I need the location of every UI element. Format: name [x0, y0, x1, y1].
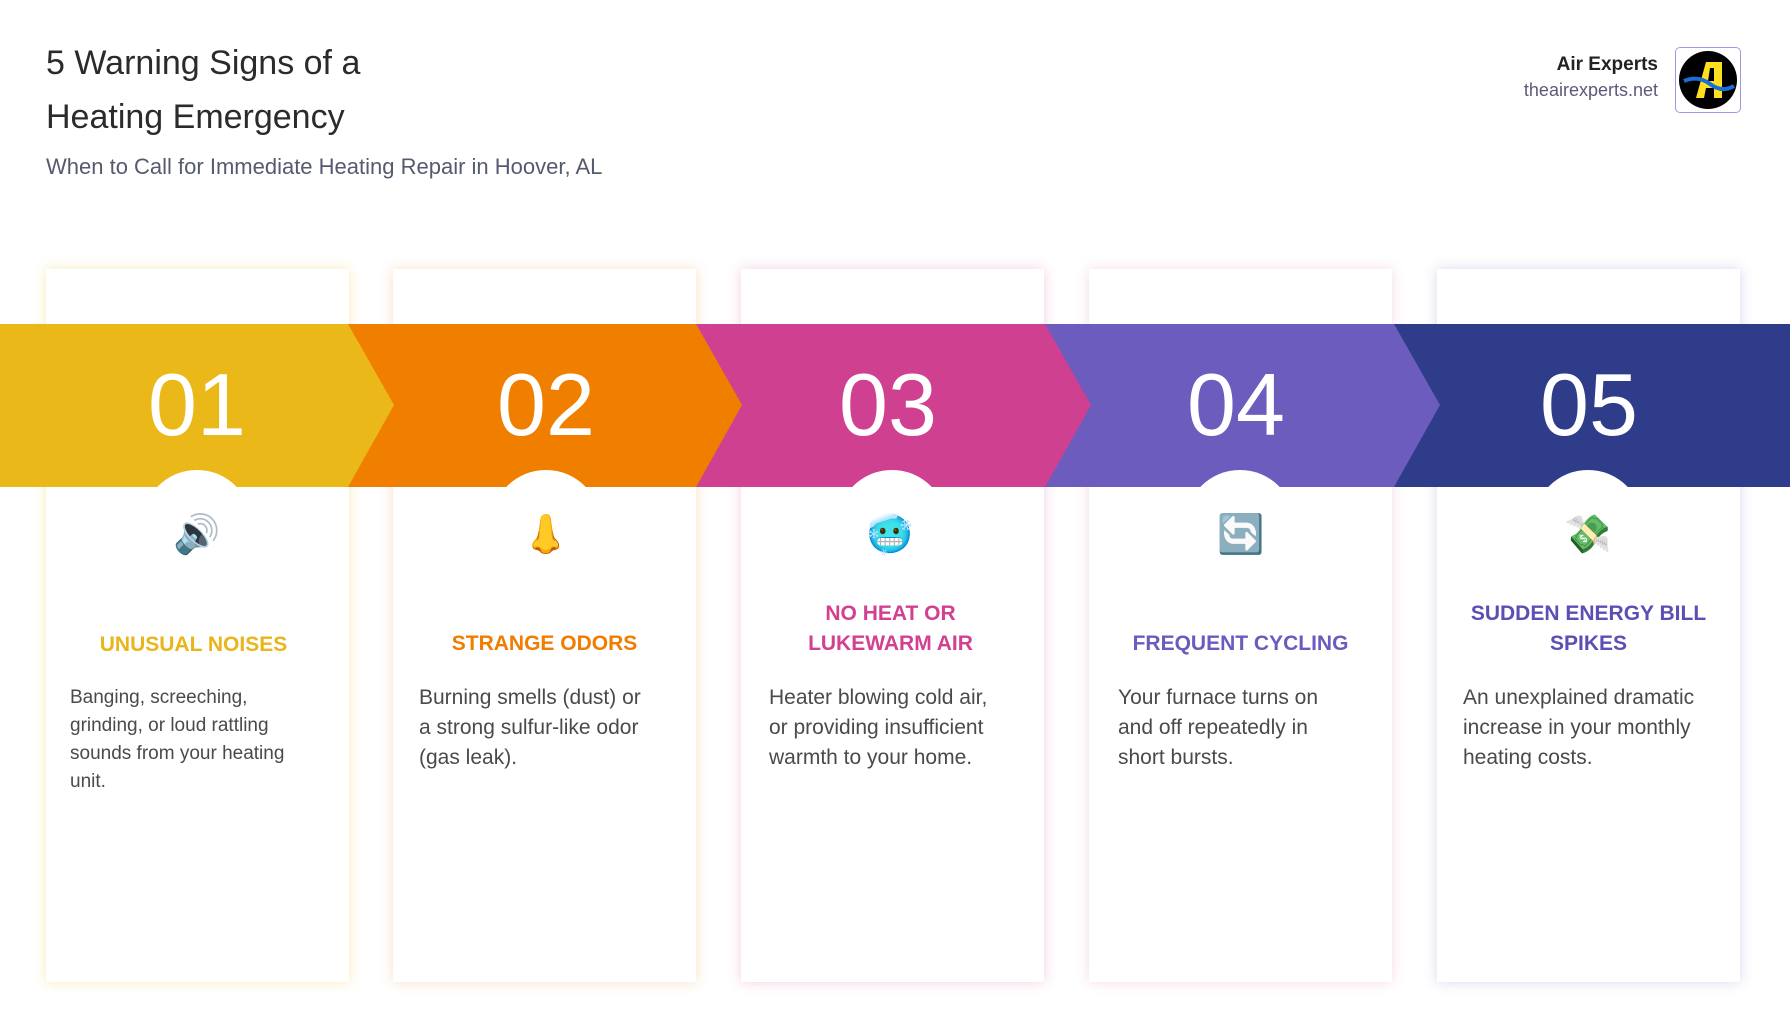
text 4: Your furnace turns on: [1118, 686, 1318, 709]
text 4: and off repeatedly in: [1118, 716, 1308, 739]
card 3: [741, 269, 1044, 982]
heading 1: UNUSUAL NOISES: [100, 633, 287, 656]
circles: [142, 470, 252, 580]
title: 5 Warning Signs of a: [46, 44, 360, 82]
heading 5: SUDDEN ENERGY BILL: [1471, 602, 1706, 625]
text 4: short bursts.: [1118, 746, 1234, 769]
text 5: increase in your monthly: [1463, 716, 1691, 739]
heading 3: [808, 602, 973, 655]
text: 04: [1187, 355, 1285, 454]
text: 03: [839, 355, 937, 454]
logo: [1675, 47, 1741, 113]
heading 5: [1471, 602, 1706, 655]
card 1: [46, 269, 349, 982]
title: [46, 44, 360, 136]
subtitle: When to Call for Immediate Heating Repair in Hoover, AL: [46, 154, 602, 179]
text: 02: [497, 355, 595, 454]
heading 3: LUKEWARM AIR: [808, 632, 973, 655]
text: 05: [1540, 355, 1638, 454]
heading 4: FREQUENT CYCLING: [1133, 632, 1348, 655]
text 3: warmth to your home.: [769, 746, 972, 769]
text 1: [70, 687, 284, 792]
text 3: Heater blowing cold air,: [769, 686, 987, 709]
icon: money: 💸: [1564, 513, 1612, 557]
text 1: sounds from your heating: [70, 743, 284, 764]
text 2: a strong sulfur-like odor: [419, 716, 638, 739]
card 4: [1089, 269, 1392, 982]
text 1: Banging, screeching,: [70, 687, 247, 708]
text 2: [419, 686, 641, 769]
icon: cold face: 🥶: [866, 513, 914, 557]
text 4: [1118, 686, 1318, 769]
brand text: [1524, 54, 1658, 100]
text 1: unit.: [70, 771, 106, 792]
brand text: Air Experts: [1557, 54, 1658, 75]
numbers: 01: [148, 355, 246, 454]
heading 5: SPIKES: [1550, 632, 1627, 655]
title: Heating Emergency: [46, 98, 345, 136]
text 5: An unexplained dramatic: [1463, 686, 1694, 709]
text 3: or providing insufficient: [769, 716, 983, 739]
text 5: [1463, 686, 1694, 769]
icon: speaker: 🔊: [173, 513, 221, 557]
text 2: Burning smells (dust) or: [419, 686, 641, 709]
heading 3: NO HEAT OR: [825, 602, 956, 625]
text 1: grinding, or loud rattling: [70, 715, 269, 736]
icon: nose: 👃: [522, 513, 570, 557]
card 5: [1437, 269, 1740, 982]
text 2: (gas leak).: [419, 746, 517, 769]
heading 2: STRANGE ODORS: [452, 632, 637, 655]
text 3: [769, 686, 987, 769]
card 2: [393, 269, 696, 982]
chevron band: [0, 324, 1790, 487]
text 5: heating costs.: [1463, 746, 1593, 769]
icon: cycle: 🔄: [1217, 513, 1265, 557]
brand text: theairexperts.net: [1524, 80, 1658, 100]
